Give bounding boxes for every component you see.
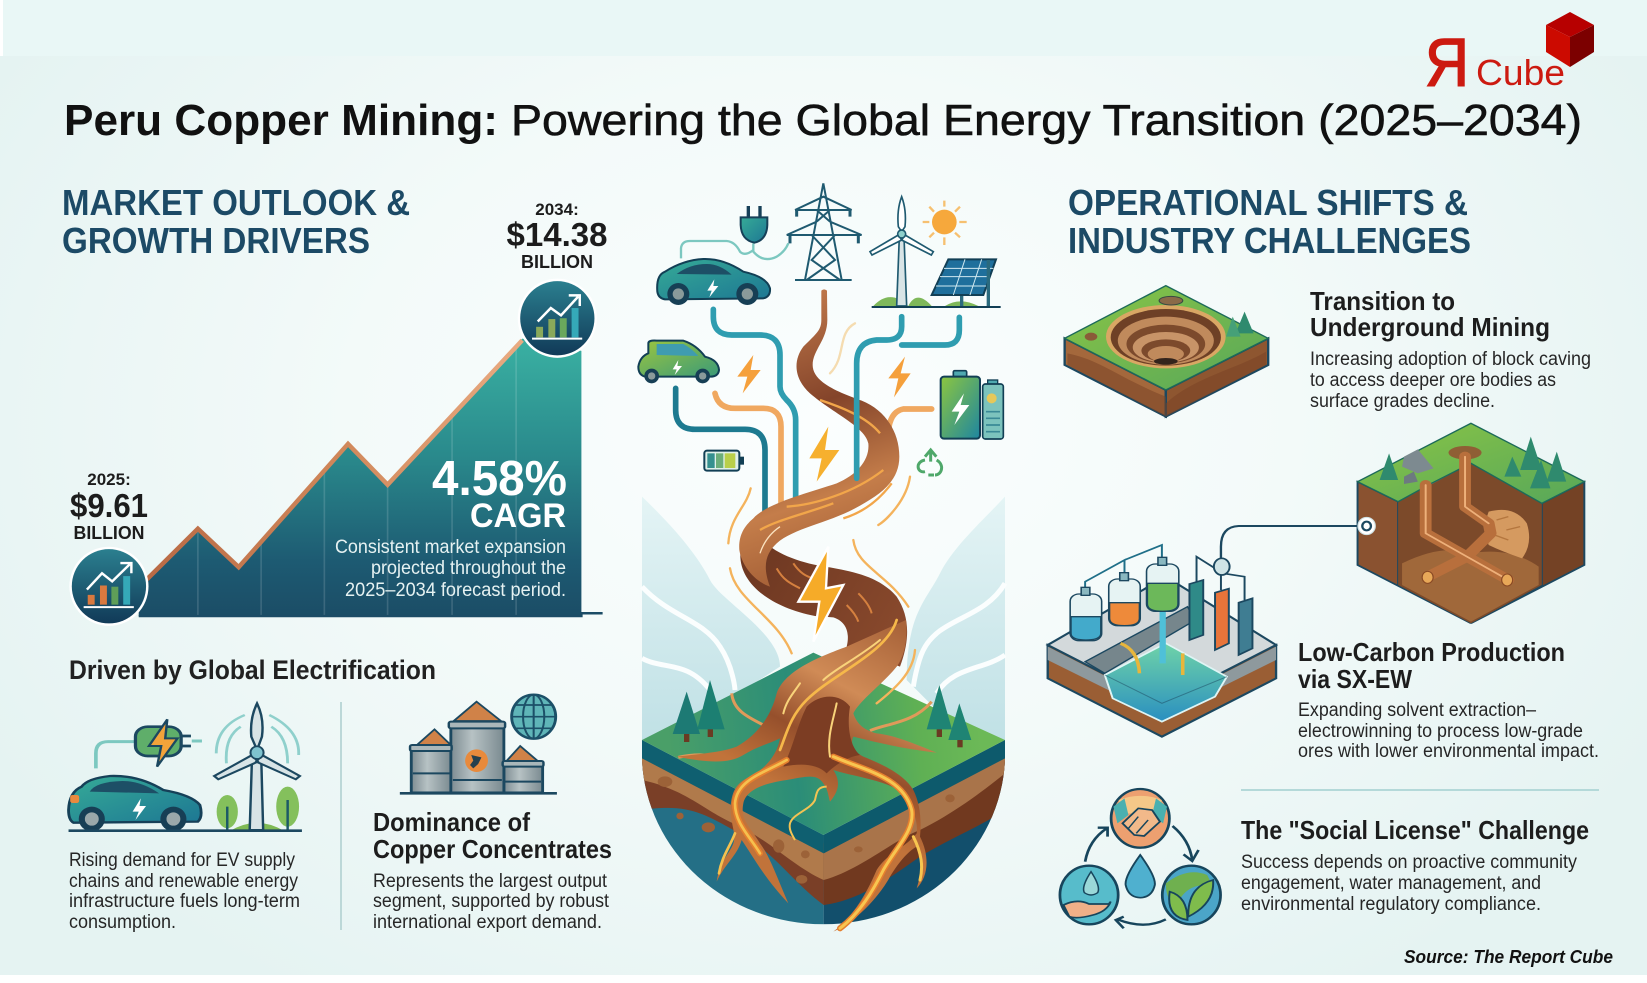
bolts <box>737 355 911 482</box>
logo: RCube: R <box>1425 25 1469 101</box>
text: dominance of copper concentrates: Copper Concentrates <box>373 834 612 864</box>
icon: EV and wind turbine <box>69 703 302 831</box>
icon: small green car <box>638 341 719 383</box>
central illustration: copper powering the energy transition <box>638 183 1005 940</box>
copper ribbon <box>739 289 907 667</box>
text: electrification drivers: Rising demand for EV supply <box>69 850 295 871</box>
text: low-carbon production: Expanding solvent extraction– <box>1298 700 1536 721</box>
text: dominance of copper concentrates: Represents the largest output <box>373 871 608 892</box>
callout: CAGR: 4.58% <box>432 452 567 506</box>
cross-section of ground <box>642 740 1005 924</box>
flame wisps <box>728 323 915 703</box>
icon: copper silos and globe <box>400 695 557 793</box>
label: 2025 value: 2025: <box>87 470 131 489</box>
text: dominance of copper concentrates: international export demand. <box>373 912 602 933</box>
cycle arrows <box>1085 826 1199 928</box>
text: social license challenge: environmental regulatory compliance. <box>1241 894 1541 915</box>
chart: market growth area <box>139 339 603 616</box>
grass streams <box>678 693 932 757</box>
text: dominance of copper concentrates <box>373 807 612 933</box>
icon: 2034 growth badge <box>518 279 597 358</box>
text: transition to underground mining: to access deeper ore bodies as <box>1310 370 1556 391</box>
background hills <box>642 497 1005 747</box>
water hand <box>1060 866 1118 924</box>
icon: electric car <box>657 259 770 305</box>
trees <box>673 680 971 747</box>
callout: CAGR <box>335 452 567 601</box>
text: electrification drivers: infrastructure fuels long-term <box>69 891 300 912</box>
icon: SX-EW plant <box>1048 517 1375 737</box>
text: dominance of copper concentrates: segment, supported by robust <box>373 891 610 912</box>
text: social license challenge <box>1241 815 1589 915</box>
logo: RCube <box>1425 12 1594 101</box>
text: transition to underground mining: Increasing adoption of block caving <box>1310 349 1591 370</box>
icon: social license cycle <box>1060 789 1221 928</box>
text: low-carbon production: electrowinning to process low-grade <box>1298 721 1583 742</box>
grass top <box>642 653 1005 835</box>
label: 2034 value: $14.38 <box>506 216 608 253</box>
logo: RCube: Cube <box>1476 52 1565 93</box>
label: 2034 value: BILLION <box>521 252 593 272</box>
text: low-carbon production: via SX-EW <box>1298 664 1412 694</box>
text: social license challenge: engagement, water management, and <box>1241 873 1541 894</box>
text: low-carbon production: Low-Carbon Production <box>1298 637 1565 667</box>
text: electrification drivers: consumption. <box>69 912 176 933</box>
earth and leaves <box>1162 866 1221 924</box>
icon: open pit mine <box>1065 286 1268 417</box>
label: 2025 value: BILLION <box>74 523 144 543</box>
label: 2034 value <box>506 200 608 272</box>
text: transition to underground mining <box>1310 286 1591 412</box>
text: electrification drivers <box>69 850 300 933</box>
copper roots <box>677 620 937 932</box>
callout: CAGR: Consistent market expansion <box>335 537 566 558</box>
title <box>64 96 1582 145</box>
text: low-carbon production <box>1298 637 1599 762</box>
text: social license challenge: The "Social License" Challenge <box>1241 815 1589 845</box>
heading: market outlook: GROWTH DRIVERS <box>62 220 370 261</box>
title: Powering the Global Energy Transition (2025–2034) <box>511 96 1582 145</box>
text: transition to underground mining: surface grades decline. <box>1310 391 1495 412</box>
divider <box>340 702 342 930</box>
text: low-carbon production: ores with lower environmental impact. <box>1298 741 1599 762</box>
heading: market outlook: MARKET OUTLOOK & <box>62 182 410 223</box>
icon: central lightning bolt <box>798 547 843 642</box>
icon: power pylon <box>787 183 862 280</box>
label: 2025 value: $9.61 <box>70 487 148 524</box>
water drop <box>1126 855 1155 898</box>
callout: CAGR: 2025–2034 forecast period. <box>345 580 566 601</box>
source credit: Source: The Report Cube <box>1404 947 1613 967</box>
label: 2034 value: 2034: <box>535 200 579 219</box>
text: electrification drivers: chains and renewable energy <box>69 871 298 892</box>
icon: plug <box>681 206 788 259</box>
text: transition to underground mining: Underground Mining <box>1310 312 1550 342</box>
callout: CAGR: CAGR <box>470 497 566 535</box>
heading: operational shifts <box>1068 182 1471 261</box>
text: transition to underground mining: Transition to <box>1310 286 1455 316</box>
divider <box>1241 789 1599 791</box>
pipes behind copper <box>676 309 932 513</box>
handshake <box>1111 789 1169 848</box>
heading: operational shifts: OPERATIONAL SHIFTS & <box>1068 182 1468 223</box>
text: dominance of copper concentrates: Dominance of <box>373 807 530 837</box>
label: 2025 value <box>70 470 148 543</box>
icon: 2025 growth badge <box>69 547 149 626</box>
title: Peru Copper Mining: <box>64 96 498 145</box>
icon: underground mine cutaway <box>1358 423 1584 623</box>
icon: wind and solar <box>870 197 1001 307</box>
heading: operational shifts: INDUSTRY CHALLENGES <box>1068 220 1471 261</box>
icon: recycle mark <box>918 450 942 475</box>
text: social license challenge: Success depends on proactive community <box>1241 852 1577 873</box>
heading: market outlook <box>62 182 410 261</box>
pipes in front <box>857 317 959 478</box>
callout: CAGR: projected throughout the <box>371 558 566 579</box>
icon: batteries <box>704 371 1003 471</box>
heading: driven by electrification: Driven by Global Electrification <box>69 655 436 685</box>
